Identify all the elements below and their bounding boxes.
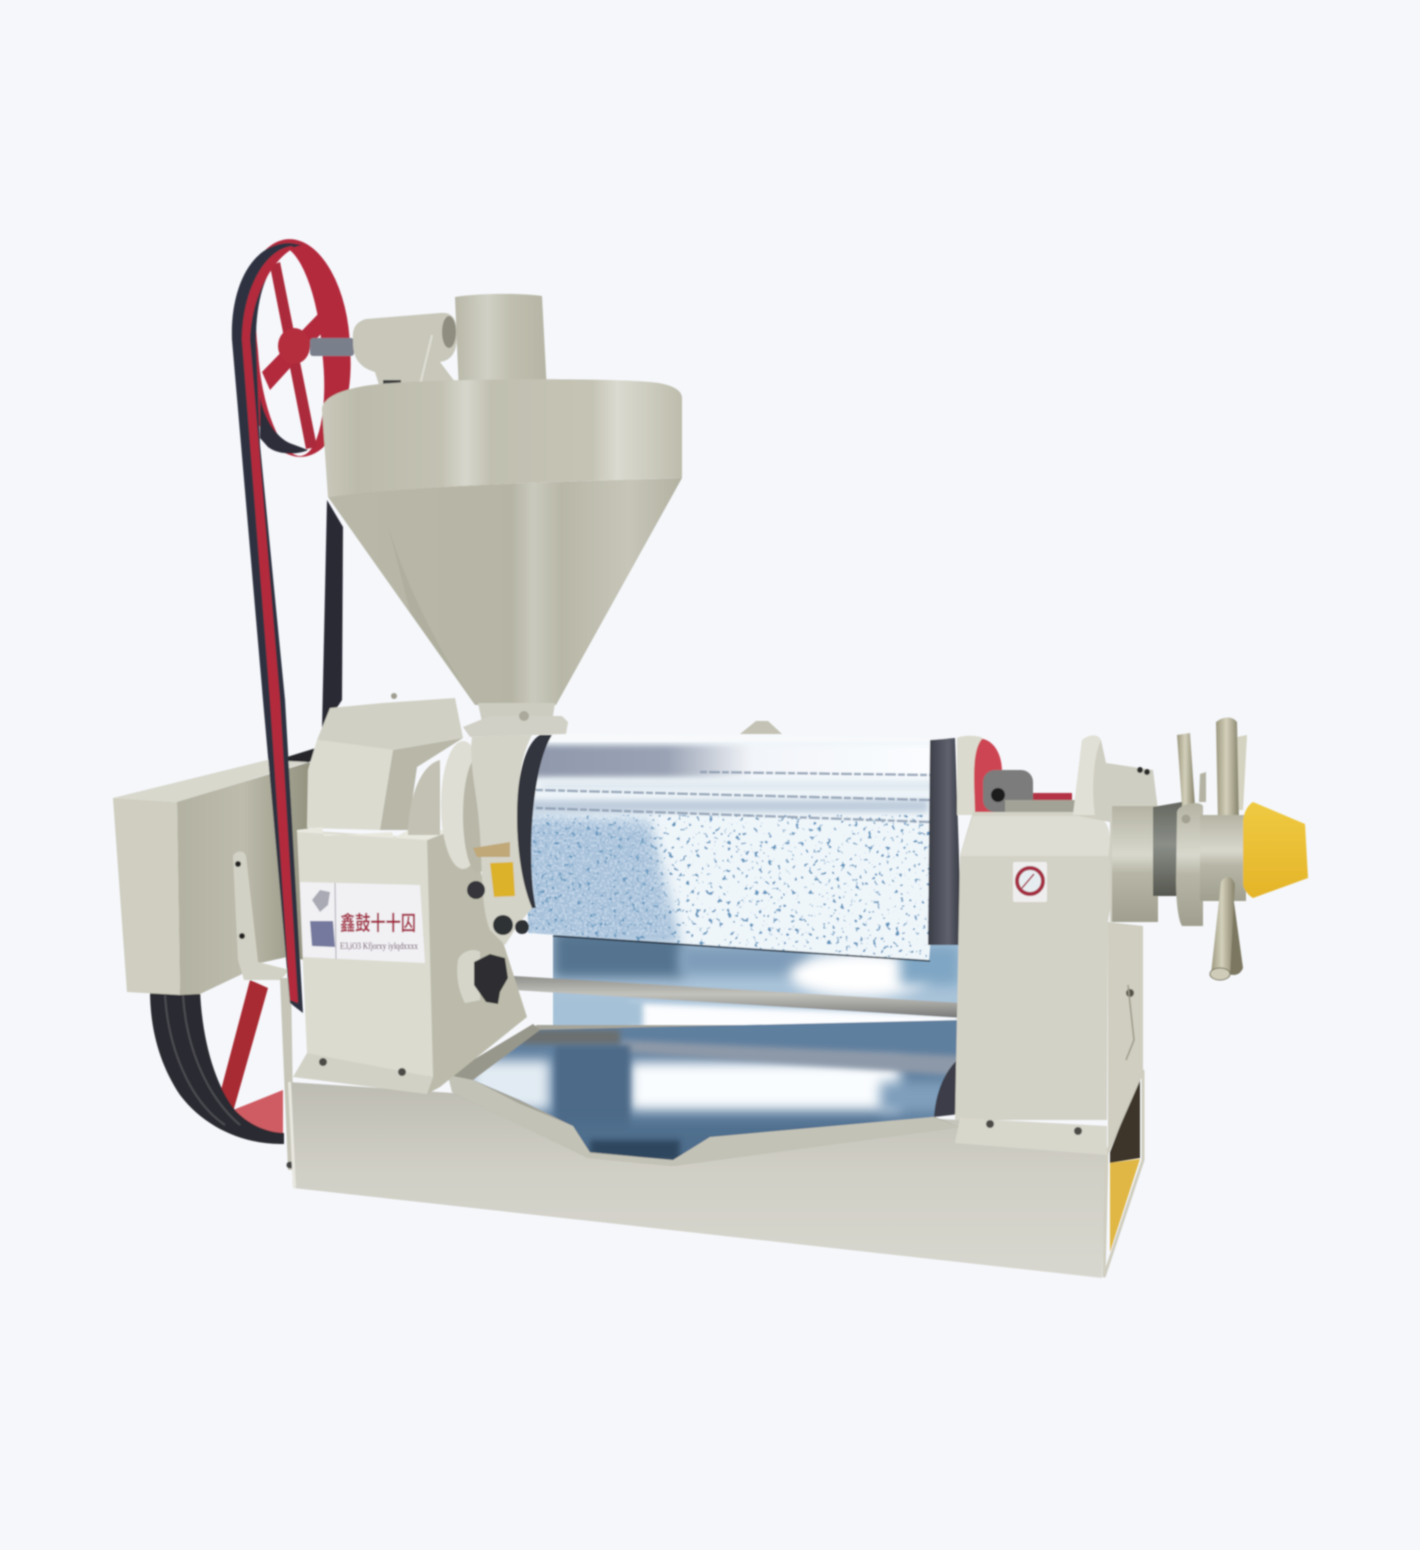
screw head housing xyxy=(1073,736,1158,922)
machine photo group xyxy=(113,239,1308,1278)
rear adjustment handles xyxy=(1177,718,1247,975)
drive shaft xyxy=(310,338,354,356)
nameplate: 鑫鼓十十囚 xyxy=(340,911,416,935)
hopper xyxy=(322,379,682,705)
rear drive belt xyxy=(287,500,343,767)
screw cylinder xyxy=(1200,815,1246,901)
left lower block xyxy=(293,830,527,1094)
base frame xyxy=(288,1082,1107,1278)
upper flywheel pulley xyxy=(239,239,351,457)
drum shadow line xyxy=(553,936,930,961)
upper belt xyxy=(232,243,303,1013)
rod xyxy=(498,975,962,1018)
feed inlet cylinder xyxy=(455,294,547,392)
nameplate xyxy=(300,882,425,963)
oil collection tray xyxy=(448,1020,965,1166)
right collar and ring xyxy=(928,736,1075,945)
warning sticker xyxy=(1013,862,1047,902)
cream locking ring xyxy=(1176,803,1203,926)
pressing chamber panel xyxy=(552,934,959,1026)
right block side and yellow end xyxy=(1104,922,1143,1277)
right block front xyxy=(955,812,1118,1155)
grey ring xyxy=(1153,802,1182,896)
electrical box xyxy=(113,760,310,1170)
galvanized drum xyxy=(520,721,950,965)
nameplate: E3,iO3 Kfjorxy iylqdxxxx xyxy=(340,941,418,951)
yellow cone xyxy=(1243,802,1308,898)
left upper block xyxy=(297,693,463,840)
front handle xyxy=(1210,877,1235,980)
lower drive pulley and belt xyxy=(150,980,284,1144)
bearing housing xyxy=(353,313,457,390)
illustration: oil press machine xyxy=(112,238,1309,1278)
left casting and neck xyxy=(408,703,568,1004)
